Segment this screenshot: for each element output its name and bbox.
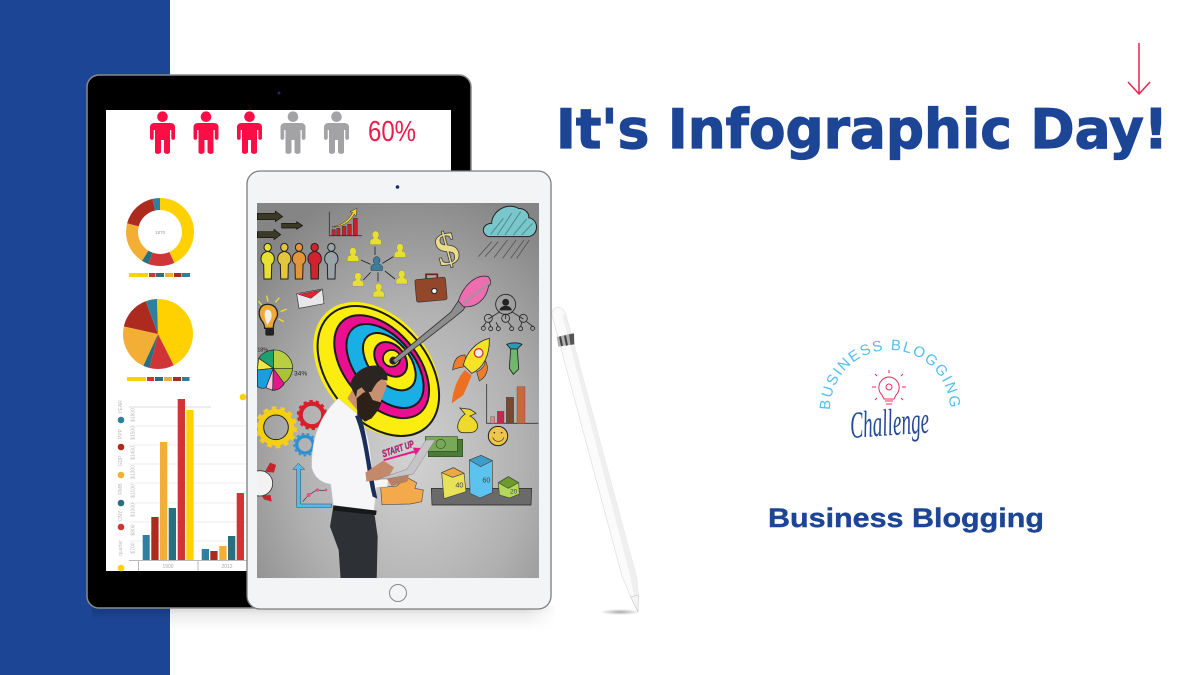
back tablet screen bbox=[106, 110, 451, 571]
main title: It's Infographic Day! bbox=[556, 98, 1168, 161]
back tablet with dashboard bbox=[87, 75, 471, 608]
pencil tip bbox=[631, 595, 638, 612]
growth bar chart doodle bbox=[329, 208, 362, 236]
pie chart bbox=[140, 316, 176, 352]
beard bbox=[357, 392, 382, 422]
bar chart legend dots: PPP bbox=[118, 428, 124, 439]
money bag bbox=[458, 408, 478, 433]
back tablet camera bbox=[278, 92, 280, 94]
rain cloud bbox=[478, 206, 537, 258]
bar chart: $1000 bbox=[130, 503, 136, 517]
red gear bbox=[298, 401, 326, 429]
arrow line chart bbox=[293, 463, 332, 507]
bar chart: $1800 bbox=[130, 408, 136, 422]
front tablet camera bbox=[396, 185, 399, 189]
alarm clock bbox=[257, 462, 276, 502]
startup sign bbox=[381, 439, 421, 461]
bar chart legend dots bbox=[118, 400, 124, 571]
challenge logo bbox=[820, 340, 960, 447]
org chart doodle bbox=[481, 294, 535, 331]
row of figures bbox=[261, 243, 338, 279]
arrow pointing down bbox=[1128, 43, 1150, 94]
bar chart: $1400 bbox=[130, 446, 136, 460]
bar chart: 1900 bbox=[162, 564, 174, 570]
stray legend dot bbox=[240, 394, 246, 400]
neck and face bbox=[347, 378, 387, 413]
bar chart legend dots: GDP bbox=[118, 455, 124, 466]
stylus pencil bbox=[552, 307, 640, 615]
percentage label: 60% bbox=[368, 116, 416, 148]
bar chart: $1100 bbox=[130, 484, 136, 498]
bar chart legend dots: CNY bbox=[118, 510, 124, 521]
dart bbox=[393, 276, 491, 363]
back tablet body bbox=[87, 75, 471, 608]
front tablet wall screen bbox=[257, 203, 539, 578]
bar chart: $800 bbox=[130, 524, 136, 536]
doodle illustrations lower bbox=[247, 366, 538, 580]
pencil shadow bbox=[600, 609, 640, 615]
laptop bbox=[379, 440, 435, 479]
doodle illustrations upper bbox=[257, 206, 537, 461]
bar chart: $700 bbox=[130, 542, 136, 554]
home button bbox=[390, 584, 406, 602]
second hand bbox=[387, 475, 409, 486]
blue gear bbox=[294, 434, 316, 456]
bar platform bbox=[431, 455, 532, 505]
forearm and hands bbox=[365, 461, 394, 481]
bar chart bbox=[129, 399, 247, 571]
startup sign: START UP bbox=[381, 439, 416, 460]
arc path heading bbox=[830, 350, 950, 410]
bar chart: 2012 bbox=[221, 564, 233, 570]
pencil body bbox=[552, 307, 638, 597]
network of people bbox=[347, 231, 407, 297]
bar chart legend dots: YEAR bbox=[118, 400, 124, 414]
bar chart legend dots: quarter bbox=[118, 540, 124, 556]
rocket bbox=[452, 338, 489, 403]
bar platform: 40 bbox=[455, 480, 463, 489]
front tablet bbox=[247, 171, 551, 609]
pie legend bbox=[127, 377, 190, 381]
subtitle: Business Blogging bbox=[768, 503, 1044, 533]
bar platform: 20 bbox=[510, 488, 518, 495]
briefcase bbox=[415, 274, 447, 302]
pie chart doodle bbox=[257, 348, 307, 390]
belt bbox=[333, 505, 377, 515]
donut centre value: 1870 bbox=[155, 230, 166, 235]
background blue panel bbox=[0, 0, 170, 675]
arched logo text: BUSINESS BLOGGING bbox=[820, 340, 960, 409]
pie chart doodle: 18% bbox=[257, 348, 268, 354]
bar chart legend dots: RMB bbox=[118, 483, 124, 495]
bar platform: 60 bbox=[482, 476, 490, 485]
bar chart: $1500 bbox=[130, 426, 136, 440]
smiley face bbox=[488, 426, 508, 446]
donut legend bbox=[129, 273, 190, 277]
donut chart bbox=[132, 204, 188, 260]
pictogram row: people bbox=[150, 111, 349, 154]
dark arrows bbox=[257, 211, 303, 240]
dollar sign: $ bbox=[429, 221, 465, 277]
stair steps bbox=[381, 477, 423, 505]
tie bbox=[355, 415, 377, 499]
pencil metal band bbox=[557, 333, 574, 347]
logo script word: Challenge bbox=[849, 400, 930, 447]
front tablet body bbox=[247, 171, 551, 609]
bar chart: $1300 bbox=[130, 465, 136, 479]
hair bbox=[350, 366, 388, 397]
tablet drop shadow bbox=[92, 606, 557, 630]
yellow gear bbox=[257, 408, 295, 447]
trousers bbox=[330, 506, 378, 580]
businessman bbox=[312, 366, 435, 580]
bullseye target bbox=[313, 302, 440, 437]
light bulb doodle bbox=[258, 296, 287, 336]
pencil shaded side bbox=[562, 314, 638, 596]
pie chart doodle: 34% bbox=[294, 371, 307, 378]
shirt bbox=[312, 398, 388, 511]
cash stack bbox=[425, 437, 463, 457]
envelope bbox=[297, 289, 324, 308]
screen artwork bbox=[247, 206, 538, 580]
logo light bulb bbox=[872, 370, 906, 404]
tie bbox=[507, 343, 522, 374]
bar chart sketch bbox=[487, 384, 538, 423]
